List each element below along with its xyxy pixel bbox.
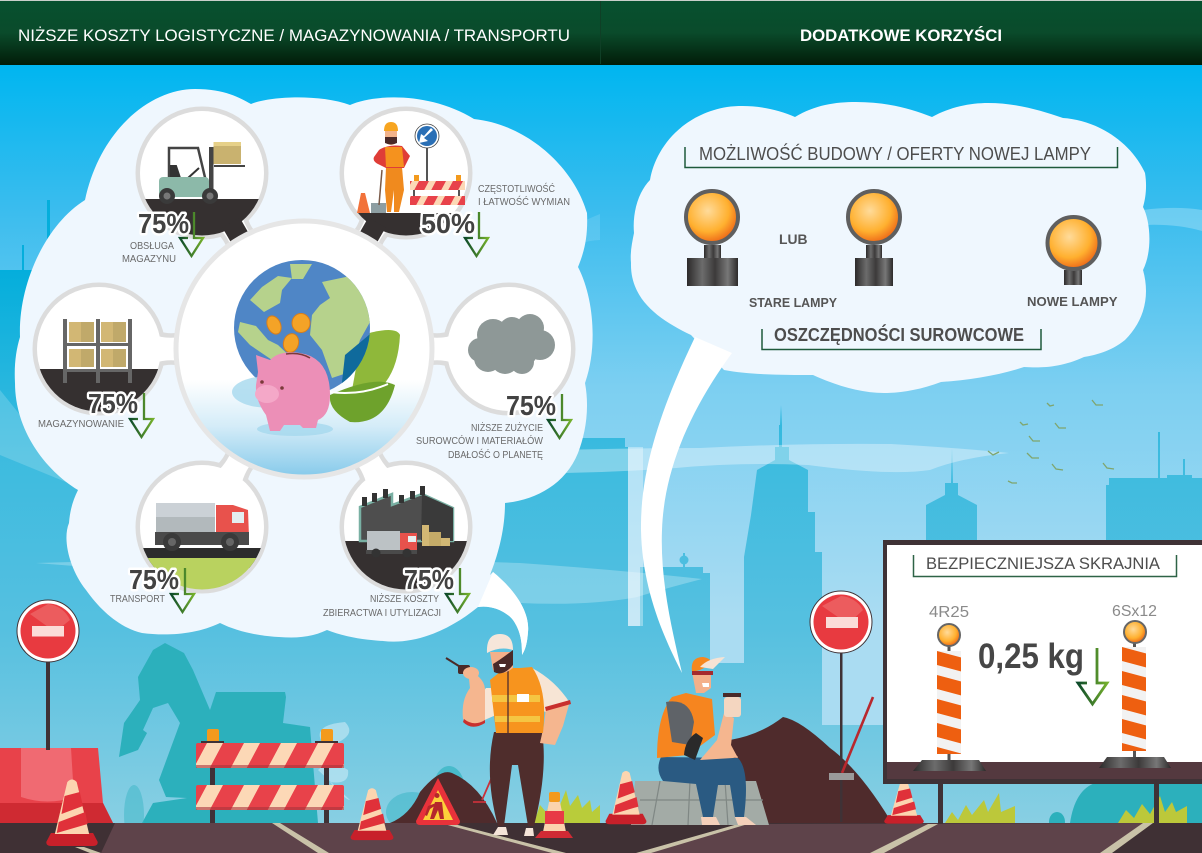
icon: warehouse rack: [40, 319, 158, 412]
stat: transport 75%: [110, 564, 194, 612]
header left title: NIŻSZE KOSZTY LOGISTYCZNE / MAGAZYNOWANIA / TRANSPORTU: [18, 26, 570, 45]
grass patch centre: [534, 790, 600, 823]
stat: collection and disposal 75%: NIŻSZE KOSZTY: [370, 592, 439, 605]
central hub: [176, 221, 432, 477]
panel: safer clearance board: [883, 540, 1202, 824]
scene: road: [0, 823, 1202, 853]
excavator silhouette: [119, 643, 318, 823]
stat: warehouse handling 75%: 75%: [138, 208, 189, 239]
stat: raw material use 75%: [416, 390, 571, 461]
traffic cone with lamp: [535, 792, 573, 838]
label: or: LUB: [779, 232, 808, 247]
stat: raw material use 75%: DBAŁOŚĆ O PLANETĘ: [448, 448, 543, 461]
city skyline silhouettes: [0, 200, 1202, 823]
road works dirt pile right: [730, 717, 892, 823]
label: old lamps: STARE LAMPY: [749, 295, 837, 310]
stone bench: [631, 781, 769, 825]
post 4R25: [913, 604, 986, 771]
icon: factory: [340, 486, 470, 591]
sleeves and arms: [479, 688, 497, 722]
stat: collection and disposal 75%: ZBIERACTWA I UTYLIZACJI: [323, 608, 441, 619]
icon: leaves: [330, 330, 400, 422]
stat: storage 75%: MAGAZYNOWANIE: [38, 419, 124, 430]
icon: forklift: [145, 142, 259, 242]
stat: raw material use 75%: SUROWCÓW I MATERIAŁÓW: [416, 434, 544, 447]
traffic cone 2: [351, 788, 393, 840]
stat: storage 75%: 75%: [88, 388, 138, 419]
icon: piggy bank: [232, 352, 333, 436]
old lamp 1: [686, 191, 738, 286]
post 6Sx12: 6Sx12: [1112, 603, 1157, 620]
speech cloud: left savings: [15, 89, 593, 655]
icon: smoke cloud: [468, 314, 555, 374]
header bar: [0, 0, 1202, 65]
icon: worker with barrier: [357, 122, 465, 242]
background teal bushes: [124, 766, 1202, 845]
board heading: BEZPIECZNIEJSZA SKRAJNIA: [926, 554, 1161, 573]
red road barrier: [0, 748, 113, 823]
stat: replacement 50%: CZĘSTOTLIWOŚĆ: [478, 182, 555, 195]
hub interiors: [37, 111, 571, 589]
grass patches right: [945, 793, 1187, 823]
worker with radio: [446, 634, 571, 836]
label: new lamps: NOWE LAMPY: [1027, 294, 1118, 309]
coins: [264, 314, 310, 354]
traffic cone 5: [884, 780, 924, 824]
value 0,25 kg with arrow: [978, 637, 1107, 704]
no entry sign left: [17, 600, 79, 750]
head: [490, 652, 513, 673]
dirt pile left: [390, 772, 497, 823]
hub outlines: [35, 109, 573, 591]
stat: raw material use 75%: 75%: [506, 390, 556, 421]
post 4R25: 4R25: [929, 604, 969, 621]
post 6Sx12: [1099, 603, 1171, 768]
stat: storage 75%: [38, 388, 153, 437]
stat: replacement 50%: 50%: [421, 208, 475, 239]
heading: material savings: OSZCZĘDNOŚCI SUROWCOWE: [774, 324, 1024, 345]
stat: collection and disposal 75%: [323, 564, 469, 619]
cloud tail: [641, 337, 732, 673]
stat: replacement 50%: [421, 182, 570, 256]
radio: [446, 658, 462, 668]
header right title: DODATKOWE KORZYŚCI: [800, 26, 1002, 45]
stat: transport 75%: 75%: [129, 564, 179, 595]
pants: [490, 732, 544, 826]
traffic cone 4: [606, 771, 646, 824]
stat: collection and disposal 75%: 75%: [404, 564, 454, 595]
light cloud stripes: [0, 208, 1202, 626]
right no entry sign: [810, 591, 872, 822]
striped barrier: [196, 729, 344, 823]
warning road works sign: [416, 778, 460, 825]
icon: globe: [234, 260, 370, 390]
stat: raw material use 75%: NIŻSZE ZUŻYCIE: [471, 421, 543, 434]
value 0,25 kg with arrow: 0,25 kg: [978, 637, 1084, 676]
sitting worker: [657, 657, 756, 825]
stat: replacement 50%: I ŁATWOŚĆ WYMIAN: [478, 195, 570, 208]
stat: warehouse handling 75%: [122, 208, 203, 265]
stat: warehouse handling 75%: MAGAZYNU: [122, 254, 176, 265]
speech cloud: new lamp: [631, 102, 1149, 673]
broom: [829, 697, 873, 780]
heading: new lamp: MOŻLIWOŚĆ BUDOWY / OFERTY NOWEJ LAMPY: [699, 143, 1091, 164]
icon: truck: [143, 503, 261, 590]
birds: [988, 400, 1114, 483]
stat: transport 75%: TRANSPORT: [110, 594, 165, 605]
stat: warehouse handling 75%: OBSŁUGA: [130, 241, 174, 252]
vest: [490, 667, 544, 733]
traffic cone 1: [46, 780, 98, 846]
small broom: [473, 777, 492, 802]
smoke wisps: [318, 722, 350, 800]
old lamp 2: [848, 191, 900, 286]
new lamp: [1048, 217, 1100, 285]
